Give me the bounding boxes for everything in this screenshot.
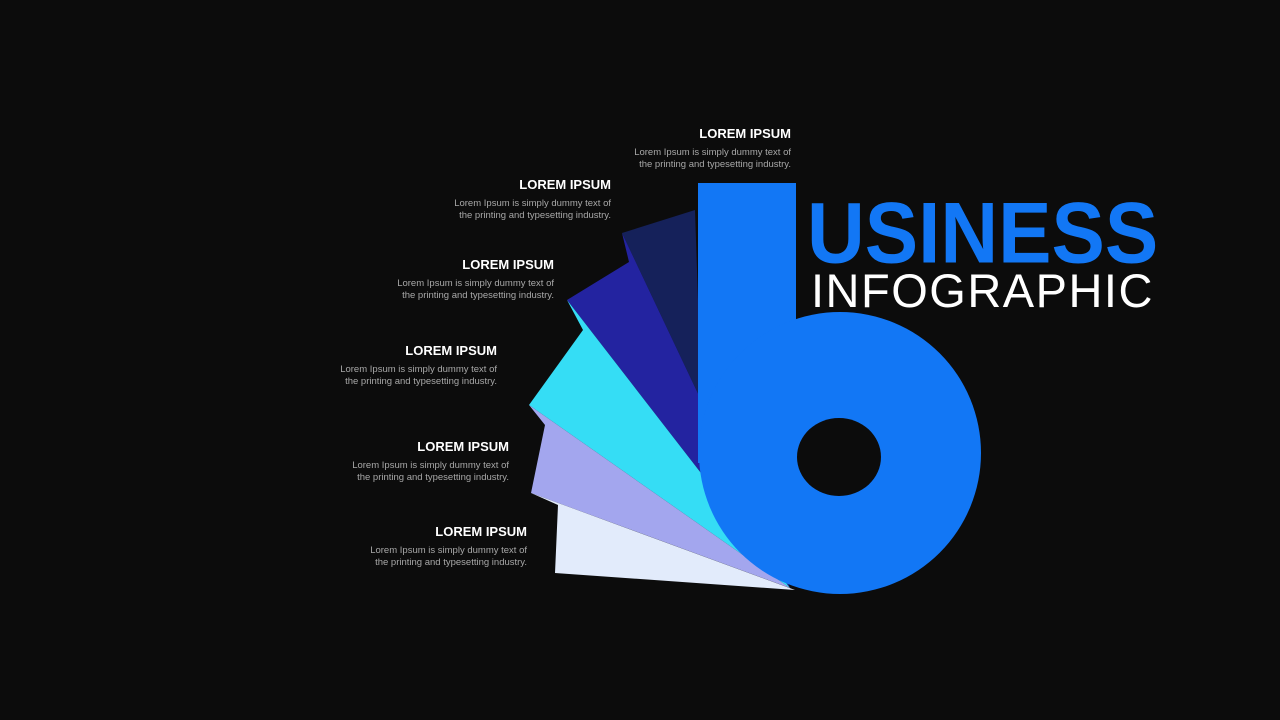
text block 4: the printing and typesetting industry. bbox=[345, 376, 497, 387]
text block 2: Lorem Ipsum is simply dummy text of bbox=[454, 198, 611, 209]
text block 6: Lorem Ipsum is simply dummy text of bbox=[370, 545, 527, 556]
text block 5: LOREM IPSUM bbox=[417, 439, 509, 454]
blade: cyan bbox=[529, 300, 790, 588]
text block 4 bbox=[340, 343, 498, 387]
text block 6: the printing and typesetting industry. bbox=[375, 557, 527, 568]
text block 3: LOREM IPSUM bbox=[462, 257, 554, 272]
text block 6 bbox=[370, 524, 528, 568]
text block 1 bbox=[634, 126, 792, 170]
text block 4: LOREM IPSUM bbox=[405, 343, 497, 358]
title: USINESS: USINESS bbox=[807, 185, 1158, 281]
blade: indigo bbox=[567, 233, 790, 588]
text block 5 bbox=[352, 439, 510, 483]
text block 4: Lorem Ipsum is simply dummy text of bbox=[340, 364, 497, 375]
text block 1: the printing and typesetting industry. bbox=[639, 159, 791, 170]
text block 5: the printing and typesetting industry. bbox=[357, 472, 509, 483]
text block 6: LOREM IPSUM bbox=[435, 524, 527, 539]
text block 1: Lorem Ipsum is simply dummy text of bbox=[634, 147, 791, 158]
text block 3 bbox=[397, 257, 554, 301]
text block 2 bbox=[454, 177, 612, 221]
text block 2: the printing and typesetting industry. bbox=[459, 210, 611, 221]
text block 3: the printing and typesetting industry. bbox=[402, 290, 554, 301]
text block 5: Lorem Ipsum is simply dummy text of bbox=[352, 460, 509, 471]
blade: white bbox=[531, 493, 795, 590]
letter b bbox=[698, 183, 981, 594]
text block 2: LOREM IPSUM bbox=[519, 177, 611, 192]
text block 1: LOREM IPSUM bbox=[699, 126, 791, 141]
subtitle: INFOGRAPHIC: INFOGRAPHIC bbox=[811, 264, 1154, 317]
blade: lavender bbox=[529, 405, 790, 588]
text block 3: Lorem Ipsum is simply dummy text of bbox=[397, 278, 554, 289]
blade: navy bbox=[622, 210, 790, 588]
